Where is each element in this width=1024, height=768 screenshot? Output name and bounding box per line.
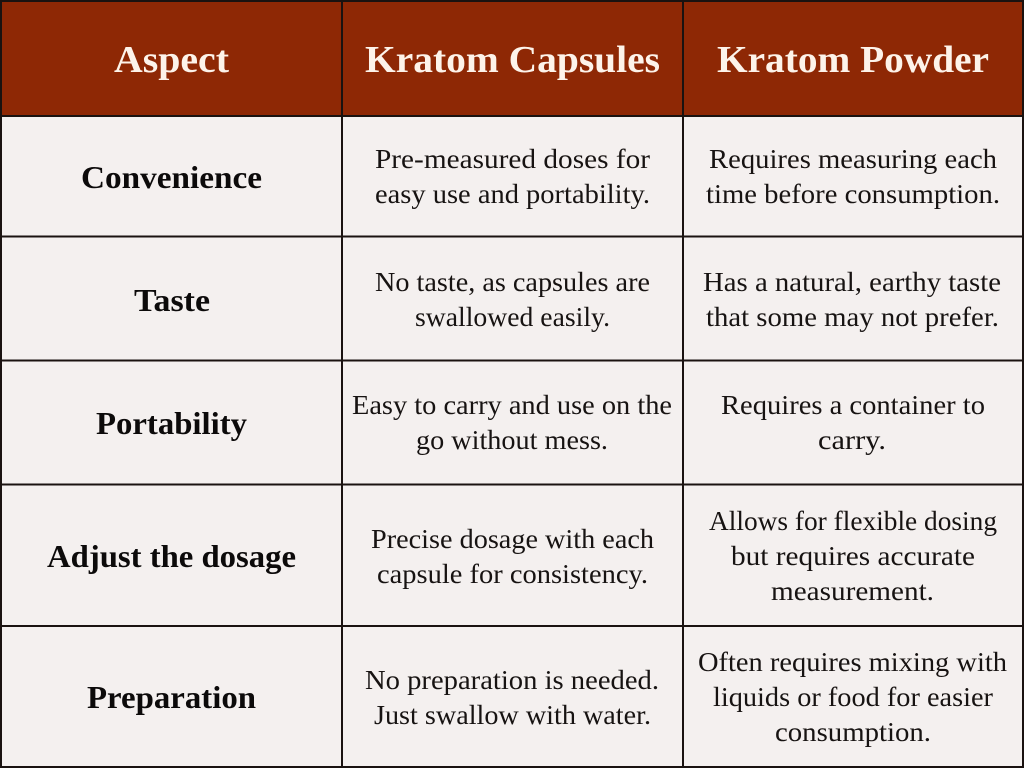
powder: dosage — [709, 506, 997, 606]
powder: preparation: Often requires mixing with — [698, 647, 1008, 677]
capsules: dosage: Precise dosage with each — [371, 524, 655, 554]
powder: taste — [703, 267, 1001, 332]
powder: convenience — [706, 144, 1000, 209]
row: Adjust the dosage: Adjust the dosage — [47, 538, 296, 574]
header: Aspect: Aspect — [114, 39, 229, 81]
header row — [0, 0, 1024, 116]
powder: taste: that some may not prefer. — [706, 302, 999, 332]
capsules: preparation: No preparation is needed. — [365, 665, 659, 695]
capsules: portability: Easy to carry and use on the — [352, 390, 672, 420]
capsules: convenience: easy use and portability. — [375, 179, 650, 209]
powder: dosage: measurement. — [771, 576, 934, 606]
capsules: portability: go without mess. — [416, 425, 608, 455]
row: Adjust the dosage — [47, 506, 997, 606]
powder: portability — [721, 390, 985, 455]
row: Taste: Taste — [134, 282, 210, 318]
row: Preparation: Preparation — [87, 679, 256, 715]
capsules: taste: swallowed easily. — [415, 302, 610, 332]
powder: preparation: consumption. — [775, 717, 931, 747]
powder: convenience: Requires measuring each — [709, 144, 998, 174]
powder: dosage: but requires accurate — [731, 541, 975, 571]
capsules: portability — [352, 390, 672, 455]
row: Convenience — [81, 144, 1000, 209]
capsules: convenience: Pre-measured doses for — [375, 144, 650, 174]
capsules: dosage: capsule for consistency. — [377, 559, 648, 589]
capsules: taste — [375, 267, 650, 332]
header: Kratom Capsules: Kratom Capsules — [365, 39, 660, 81]
powder: taste: Has a natural, earthy taste — [703, 267, 1001, 297]
powder: preparation — [698, 647, 1008, 747]
capsules: preparation — [365, 665, 659, 730]
capsules: convenience — [375, 144, 650, 209]
row: Preparation — [87, 647, 1008, 747]
header: Kratom Powder: Kratom Powder — [717, 39, 989, 81]
capsules: taste: No taste, as capsules are — [375, 267, 650, 297]
powder: portability: Requires a container to — [721, 390, 985, 420]
row: Taste — [134, 267, 1001, 332]
powder: portability: carry. — [818, 425, 886, 455]
powder: preparation: liquids or food for easier — [713, 682, 993, 712]
row: Convenience: Convenience — [81, 159, 262, 195]
powder: dosage: Allows for flexible dosing — [709, 506, 997, 536]
row: Portability — [96, 390, 985, 455]
row: Portability: Portability — [96, 405, 247, 441]
powder: convenience: time before consumption. — [706, 179, 1000, 209]
capsules: dosage — [371, 524, 655, 589]
capsules: preparation: Just swallow with water. — [374, 700, 651, 730]
